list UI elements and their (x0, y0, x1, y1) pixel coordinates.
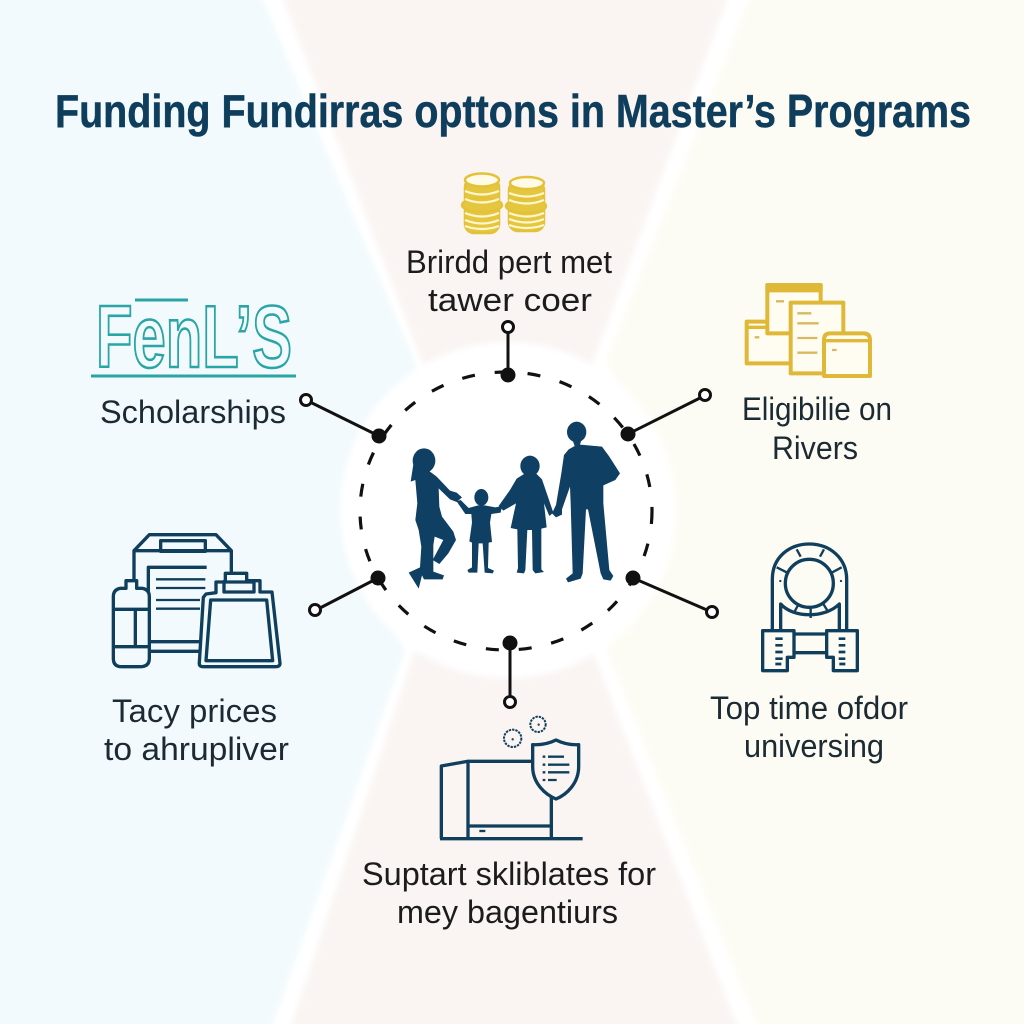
label: top option (406, 244, 612, 318)
bottle (113, 581, 149, 667)
connector: upper left (300, 394, 385, 442)
man (552, 422, 620, 582)
panel: right sector (606, 0, 1024, 1024)
child (457, 489, 502, 573)
panel: central hub (340, 342, 676, 678)
girl (499, 456, 553, 573)
icon: university arch (763, 544, 857, 671)
label: top option: Brirdd pert met (406, 244, 612, 280)
connector: lower left (310, 572, 384, 616)
connector: upper right (622, 390, 710, 440)
icon: FenL'S logo: FenL’S (96, 287, 292, 386)
clipboard (199, 573, 280, 667)
woman (409, 448, 462, 589)
label: tacy prices: to ahrupliver (104, 731, 289, 767)
panel: left sector (0, 0, 418, 1024)
label: bottom option: mey bagentiurs (397, 894, 618, 930)
panel: top sector (272, 0, 738, 370)
connector: lower right (627, 572, 718, 618)
label: eligibility: Eligibilie on (742, 391, 892, 427)
label: scholarships: Scholarships (100, 394, 286, 430)
label: bottom option (362, 856, 656, 930)
label: top time: Top time ofdor (710, 690, 908, 726)
gears (504, 730, 521, 747)
panel: bottom sector (282, 650, 748, 1024)
icon: computer with shield (440, 717, 583, 839)
icon: case, bottle and clipboard (113, 535, 280, 667)
label: top option: tawer coer (428, 282, 592, 318)
shield (533, 740, 579, 799)
label: top time: universing (744, 728, 884, 764)
label: eligibility: Rivers (772, 430, 858, 466)
connector: bottom (504, 637, 516, 708)
icon: coin stacks (462, 174, 546, 233)
label: bottom option: Suptart skliblates for (362, 856, 656, 892)
icon: family silhouette (409, 422, 620, 589)
label: tacy prices: Tacy prices (112, 693, 277, 729)
label: eligibility (742, 391, 892, 466)
dashed ring (360, 372, 652, 650)
icon: documents (747, 285, 870, 376)
label: tacy prices (104, 693, 289, 767)
label: top time (710, 690, 908, 764)
connector: top (502, 322, 514, 381)
